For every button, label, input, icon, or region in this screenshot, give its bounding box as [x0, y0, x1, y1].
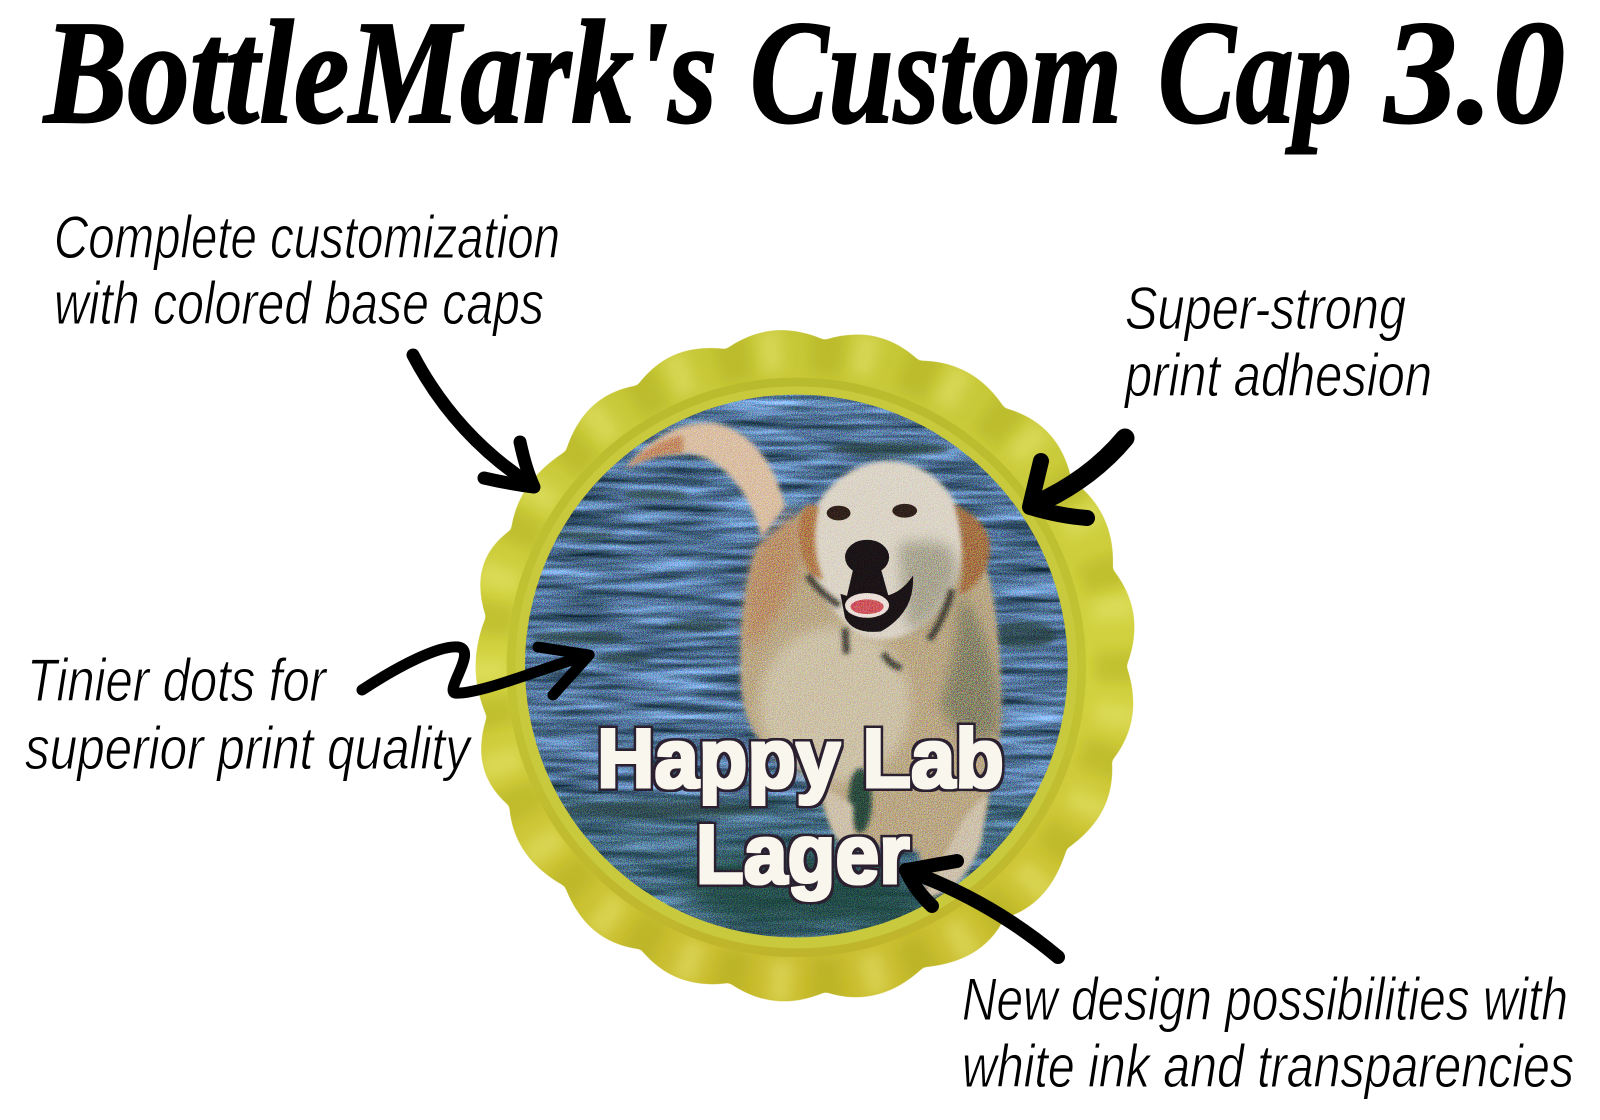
ring highlight: [515, 386, 1077, 948]
neck shadows: [807, 576, 952, 667]
cap text: Lager: Lager: [696, 807, 910, 901]
arrow to cap rim: [413, 355, 534, 487]
title: [42, 0, 1565, 155]
printed photo: [523, 392, 1074, 943]
raised ring: [507, 378, 1086, 957]
lip: [845, 593, 889, 618]
tail tip: [625, 435, 683, 469]
right ear: [954, 504, 990, 594]
head: [807, 461, 963, 640]
bottle cap with printed photo: [476, 330, 1134, 1001]
dark green water under dog: [683, 846, 950, 934]
cap text: Happy Lab: Happy Lab: [597, 711, 1004, 805]
bridge to mouth: [847, 570, 888, 597]
dog body: [740, 507, 1001, 897]
callout: print quality: [25, 647, 473, 782]
arrow to print surface: [1030, 438, 1125, 518]
dark water streaks: [532, 442, 1055, 818]
callout text line two: superior print quality: [25, 715, 473, 782]
callout: print adhesion: [1123, 275, 1432, 409]
right side shade: [941, 594, 999, 740]
callout text line two: print adhesion: [1123, 342, 1432, 409]
nose: [845, 540, 890, 570]
dog tail: [625, 423, 785, 539]
mouth: [840, 576, 913, 632]
front legs: [823, 787, 986, 897]
callout text line one: Complete customization: [54, 204, 560, 271]
eyes: [827, 504, 917, 520]
gap between legs: [849, 768, 872, 833]
face shade: [899, 541, 957, 631]
callout text line two: with colored base caps: [54, 270, 544, 337]
callout text line one: Tinier dots for: [27, 647, 328, 714]
scalloped yellow skirt: [476, 330, 1134, 1001]
water: [523, 392, 1074, 943]
shoulder tan: [745, 507, 800, 649]
callout: colored base caps: [54, 204, 560, 337]
squiggle arrow to dots: [362, 647, 589, 695]
tongue: [851, 599, 884, 614]
left ear: [799, 504, 823, 580]
callout text line one: Super-strong: [1125, 275, 1406, 342]
callout: white ink: [962, 966, 1574, 1100]
flute shading on skirt: [486, 349, 1120, 983]
lower water tint: [558, 796, 1034, 938]
arrow to white ink: [906, 861, 1058, 957]
grain overlay: [523, 392, 1074, 943]
chest highlight: [759, 626, 911, 782]
